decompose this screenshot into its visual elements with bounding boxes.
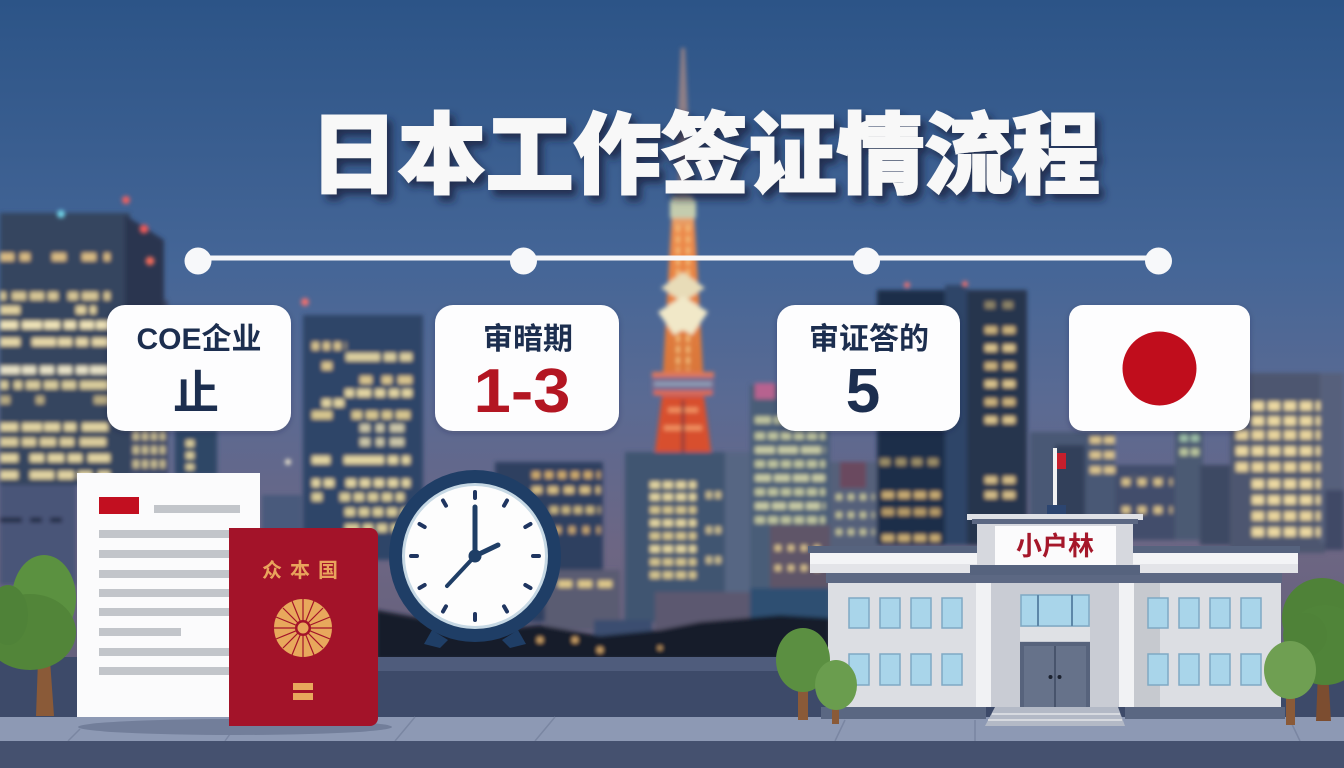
background: blurred city skyline xyxy=(0,48,1344,660)
building: mid-rise cluster behind clock xyxy=(262,462,620,630)
card: Japan flag xyxy=(1069,305,1250,431)
columns xyxy=(976,581,1134,707)
card value: 止 xyxy=(173,367,219,419)
card value: 1-3 xyxy=(474,357,570,426)
icon: clock xyxy=(389,470,561,648)
treeline at city base xyxy=(376,588,830,660)
title: 日本工作签证情流程 xyxy=(310,106,1100,205)
icon: trees by school left xyxy=(776,628,857,724)
card label: 审暗期 xyxy=(483,323,573,356)
building: low grey block xyxy=(0,485,76,585)
icon: trees by school right xyxy=(1264,578,1344,725)
Tokyo Tower xyxy=(652,48,714,452)
icon: document xyxy=(77,473,392,735)
card value: 5 xyxy=(846,357,880,426)
card: COE step xyxy=(107,305,291,431)
building: small dark block xyxy=(175,430,217,475)
plinth and steps xyxy=(821,707,1285,726)
timeline node 3 xyxy=(853,248,880,274)
rooftop beacons xyxy=(57,196,968,465)
foreground: pavement and road xyxy=(0,717,1344,768)
icon: left tree xyxy=(0,555,76,716)
timeline node 2 xyxy=(510,248,537,274)
card label: 审证答的 xyxy=(809,323,929,356)
building: right mid-rise cluster xyxy=(1030,430,1203,540)
building body xyxy=(828,583,1281,707)
flagpole and flag xyxy=(1047,448,1066,514)
building: far left tower xyxy=(0,213,168,485)
building: pale office tower xyxy=(750,383,830,590)
card: review period xyxy=(435,305,619,431)
card: visa issue xyxy=(777,305,960,431)
timeline node 1 xyxy=(184,248,212,274)
school name sign: 小户林 xyxy=(1016,531,1094,561)
wing roof xyxy=(808,546,1300,583)
foreground: rear wall xyxy=(0,657,1344,717)
building: right lit tower xyxy=(1200,373,1344,553)
central block xyxy=(967,514,1143,575)
timeline node 4 xyxy=(1145,248,1172,274)
passport emblem xyxy=(274,599,332,657)
icon: passport xyxy=(229,528,378,726)
passport heading: 众本国 xyxy=(262,559,346,582)
timeline xyxy=(184,248,1172,274)
building: small blocks right of office tower xyxy=(830,462,878,552)
building: dark tall tower right xyxy=(877,285,1027,545)
passport bars xyxy=(293,683,313,700)
windows xyxy=(849,595,1261,685)
building: tall tower left of clock xyxy=(303,315,423,560)
icon: school building xyxy=(808,448,1300,726)
icon: red sun xyxy=(1122,332,1196,406)
building: central block below tower xyxy=(625,452,755,622)
building: far right edge xyxy=(1325,490,1344,550)
card label: COE企业 xyxy=(136,323,262,356)
entrance door xyxy=(1020,627,1090,707)
